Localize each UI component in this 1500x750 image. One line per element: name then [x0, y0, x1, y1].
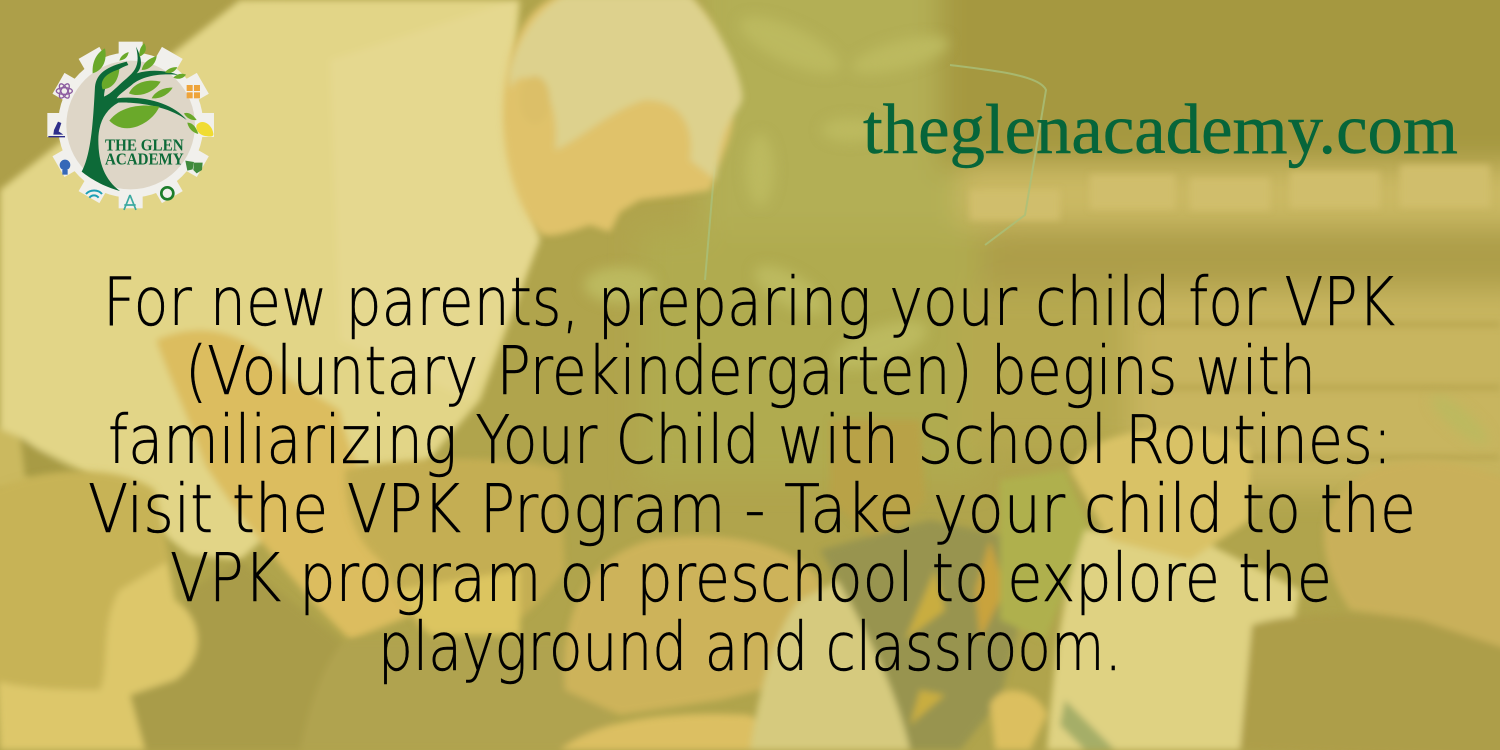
far right child — [1240, 614, 1500, 750]
logo wordmark: THE GLEN — [105, 136, 184, 155]
dinosaur shirt child — [830, 420, 925, 545]
logo icons — [48, 82, 213, 210]
main text block — [88, 263, 1416, 686]
line 6: playground and classroom. — [378, 608, 1122, 686]
middle child — [300, 640, 622, 750]
icon: calculator — [187, 85, 200, 98]
man's head — [503, 0, 742, 235]
icon: palette — [196, 122, 213, 136]
icon: gear and DNA — [161, 187, 173, 199]
line 2: (Voluntary Prekindergarten) begins with — [185, 332, 1316, 410]
logo inner disc — [66, 61, 195, 189]
icon: atom — [56, 82, 72, 100]
children — [0, 420, 1500, 750]
dark clothing region — [130, 560, 350, 750]
logo gear outline — [47, 42, 214, 208]
icon: theatre masks — [185, 161, 203, 173]
man's shirt and arm — [0, 0, 540, 640]
icon: light bulb — [60, 160, 70, 175]
icon: microscope — [48, 122, 65, 137]
website URL: theglenacademy.com — [863, 91, 1458, 169]
left boy — [0, 471, 198, 750]
logo wordmark second line: ACADEMY — [105, 149, 184, 168]
plant — [1000, 470, 1090, 640]
line 5: VPK program or preschool to explore the — [170, 539, 1332, 617]
icon: compass — [124, 195, 136, 210]
icon: wifi — [86, 190, 102, 198]
logo tree — [82, 43, 198, 191]
right child — [1047, 530, 1300, 750]
curly child — [564, 536, 830, 715]
logo: The Glen Academy gear — [47, 42, 214, 210]
